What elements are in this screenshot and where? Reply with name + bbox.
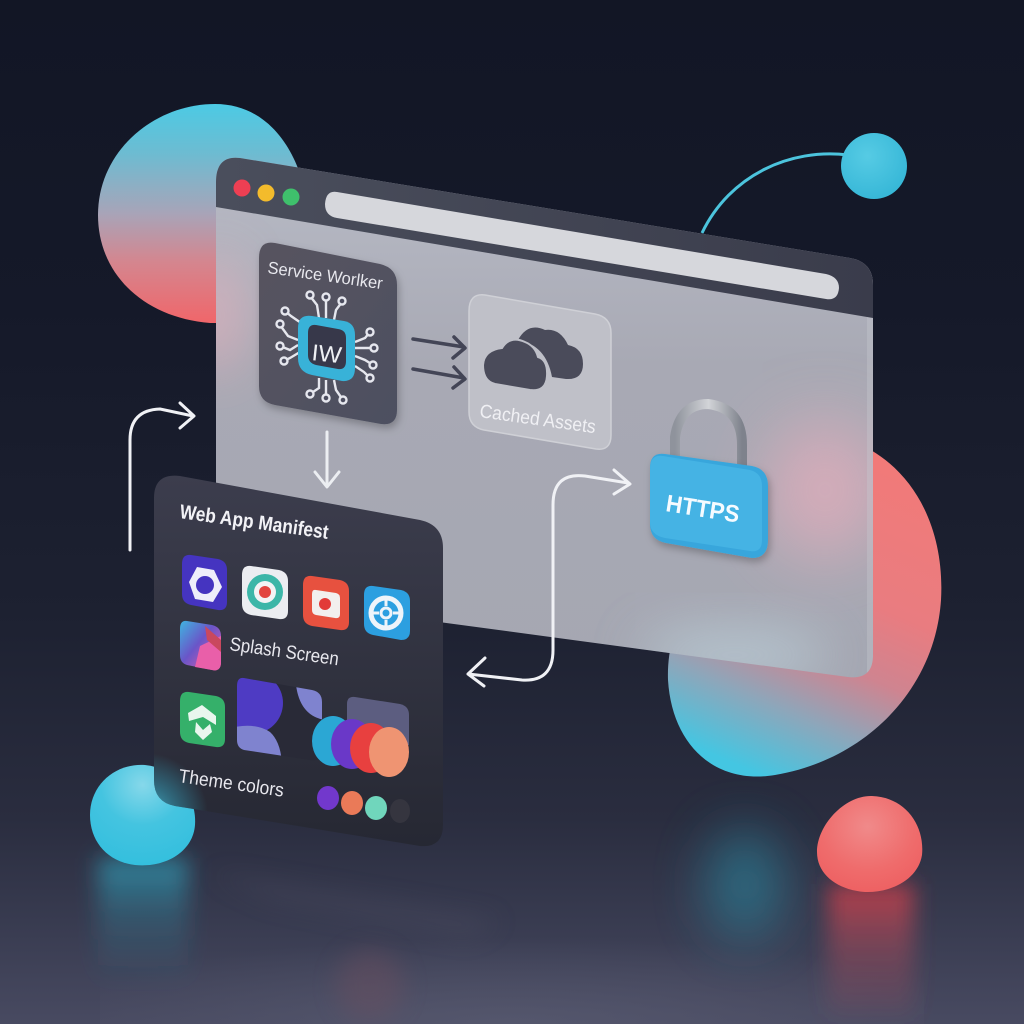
lock body	[650, 456, 762, 551]
shackle	[675, 404, 742, 470]
theme circles	[312, 716, 409, 777]
ball: bottom left	[90, 765, 195, 865]
service worker card	[259, 243, 397, 424]
arrow: manifest to window	[130, 403, 194, 550]
soft window tints	[192, 255, 885, 680]
cached assets card	[469, 295, 611, 449]
address bar	[325, 192, 839, 299]
icon: white ring app	[242, 566, 288, 619]
blob: top left	[98, 104, 330, 323]
icon: blue flower app	[364, 586, 410, 640]
connector arc to ball	[702, 154, 848, 233]
chip glyph: IW	[310, 339, 343, 368]
icon: splash tile	[180, 621, 221, 670]
circuit traces	[276, 292, 378, 404]
label: splash screen: Splash Screen	[228, 634, 340, 670]
icon: clouds	[483, 328, 583, 390]
icon: purple hexagon app	[182, 555, 227, 610]
label: service worker: Service Worlker	[266, 258, 384, 293]
floor glow and reflections	[98, 830, 924, 1024]
window controls	[234, 180, 300, 206]
label: theme colors: Theme colors	[177, 766, 285, 802]
title bar	[216, 158, 873, 318]
two-way arrow: manifest to https	[468, 470, 630, 686]
swatches	[317, 786, 410, 823]
heading: web app manifest: Web App Manifest	[178, 501, 330, 544]
browser window	[192, 158, 885, 680]
chip	[298, 316, 355, 381]
blob: bottom right red	[817, 796, 922, 892]
icon: red camera app	[303, 576, 349, 630]
padlock https	[650, 404, 768, 558]
icon: green app	[180, 692, 225, 747]
arrows: service worker to cache	[413, 337, 465, 388]
arrow: down to manifest	[315, 432, 339, 487]
label: cached assets: Cached Assets	[478, 401, 597, 438]
blob: right	[668, 440, 941, 777]
splash preview	[237, 678, 322, 756]
label: https: HTTPS	[664, 490, 741, 529]
ball: top right	[841, 133, 907, 199]
lock side	[650, 454, 768, 558]
manifest card	[154, 476, 443, 846]
theme rectangle	[347, 697, 409, 750]
